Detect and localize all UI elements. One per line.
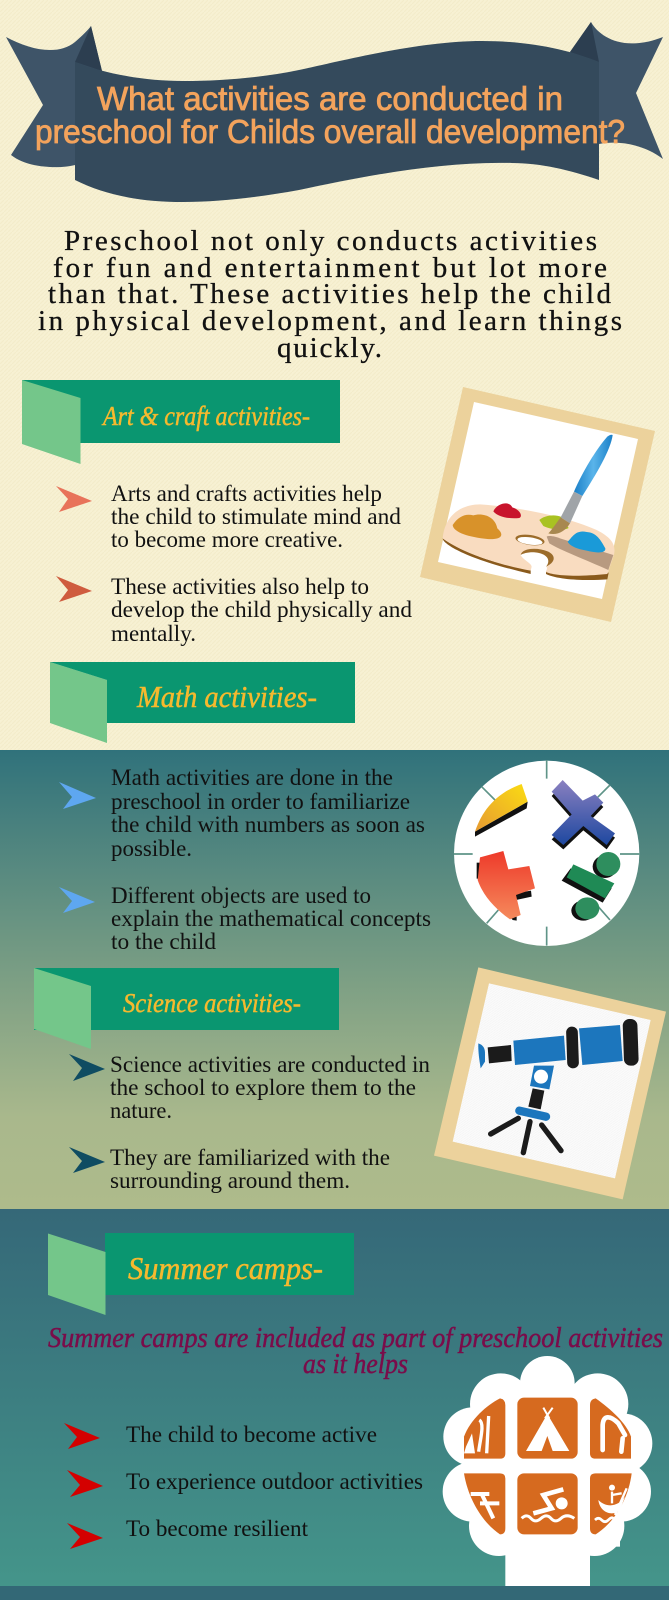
text: art bullet 1: to become more creative.: [111, 527, 343, 552]
text: science bullet 2: surrounding around them.: [110, 1168, 350, 1193]
ribbon right fold: [570, 22, 599, 62]
summer camps subheading: as it helps: [303, 1348, 408, 1380]
ribbon main band: [75, 41, 599, 202]
text: science bullet 2: They are familiarized with the: [110, 1145, 390, 1170]
arrow: summer bullet 2: [67, 1470, 103, 1497]
intro paragraph: in physical development, and learn things: [38, 305, 622, 337]
banner: Summer camps: [48, 1233, 354, 1315]
text: art bullet 1: Arts and crafts activities help: [111, 481, 382, 506]
tree crown and trunk: [443, 1356, 652, 1586]
intro paragraph: Preschool not only conducts activities: [64, 225, 597, 257]
cream background: [0, 0, 669, 750]
text: science bullet 1: nature.: [110, 1098, 172, 1123]
banner: Summer camps: Summer camps-: [128, 1250, 323, 1286]
text: science bullet 1: [110, 1052, 430, 1123]
text: math bullet 1: Math activities are done in the: [111, 765, 393, 790]
text: summer bullet 3: To become resilient: [126, 1516, 309, 1541]
title text: What activities are conducted in: [97, 80, 563, 117]
text: art bullet 2: mentally.: [111, 621, 196, 646]
icon tile: canoe: [590, 1473, 632, 1534]
icon: tree of outdoor activities: [443, 1356, 652, 1586]
text: art bullet 1: [111, 481, 401, 552]
icon tile: tent: [517, 1398, 578, 1459]
icon: yellow division wedge: [475, 784, 528, 837]
ribbon left fold: [75, 26, 102, 71]
title ribbon: [6, 22, 663, 202]
text: math bullet 2: [111, 883, 431, 954]
bottom footer strip: [0, 1586, 669, 1600]
ribbon right tail: [570, 22, 663, 159]
text: math bullet 2: explain the mathematical concepts: [111, 906, 431, 931]
banner: Math: Math activities-: [136, 679, 317, 714]
text: math bullet 2: Different objects are used to: [111, 883, 371, 908]
photo card: paint palette: [420, 387, 655, 622]
banner: Science: [34, 968, 339, 1049]
arrow: art bullet 2: [56, 576, 92, 602]
text: art bullet 1: the child to stimulate mind and: [111, 504, 401, 529]
arrow: summer bullet 1: [64, 1423, 100, 1449]
banner: Art and craft: [22, 380, 340, 464]
intro paragraph: quickly.: [277, 332, 382, 364]
text: summer bullet 1: The child to become active: [126, 1422, 377, 1447]
icon tile: picnic table: [464, 1473, 505, 1534]
text: science bullet 1: Science activities are conducted in: [110, 1052, 430, 1077]
icon: red plus sign: [477, 851, 535, 921]
text: summer bullet 2: To experience outdoor activities: [126, 1469, 423, 1494]
arrow: math bullet 1: [59, 782, 96, 809]
text: art bullet 2: These activities also help to: [111, 574, 369, 599]
photo card: telescope: [434, 967, 666, 1199]
icon: green division sign: [562, 852, 620, 921]
intro paragraph: than that. These activities help the child: [48, 278, 612, 310]
intro paragraph: [38, 225, 622, 364]
summer camps background panel: [0, 1209, 669, 1586]
arrow: summer bullet 3: [67, 1523, 103, 1549]
text: art bullet 2: [111, 574, 412, 646]
text: math bullet 1: preschool in order to familiarize: [111, 789, 410, 814]
title text: preschool for Childs overall development?: [35, 113, 625, 150]
banner: Science: Science activities-: [123, 988, 301, 1018]
intro paragraph: for fun and entertainment but lot more: [53, 252, 607, 284]
arrow: science bullet 1: [69, 1054, 105, 1081]
title text: [35, 80, 625, 150]
ribbon left tail: [6, 26, 102, 167]
icon tile: shelter: [590, 1398, 631, 1459]
arrow: art bullet 1: [56, 486, 92, 512]
icon: math symbols circle: [454, 760, 639, 946]
icon tile: swimmer: [517, 1473, 578, 1534]
text: math bullet 2: to the child: [111, 929, 217, 954]
text: math bullet 1: the child with numbers as soon as: [111, 812, 425, 837]
math and science background panel: [0, 750, 669, 1209]
summer camps subheading: [48, 1322, 663, 1380]
icon: blue multiply sign: [552, 780, 615, 849]
arrow: science bullet 2: [69, 1147, 105, 1173]
icon: telescope: [478, 1019, 639, 1153]
text: art bullet 2: develop the child physically and: [111, 597, 412, 622]
text: math bullet 1: [111, 765, 425, 861]
banner: Art and craft: Art & craft activities-: [101, 401, 310, 431]
text: science bullet 2: [110, 1145, 390, 1193]
text: science bullet 1: the school to explore them to the: [110, 1075, 416, 1100]
banner: Math: [50, 662, 355, 743]
icon: palette and brush: [443, 435, 614, 580]
text: math bullet 1: possible.: [111, 836, 192, 861]
icon tile: hiker: [464, 1398, 505, 1459]
arrow: math bullet 2: [59, 887, 95, 913]
